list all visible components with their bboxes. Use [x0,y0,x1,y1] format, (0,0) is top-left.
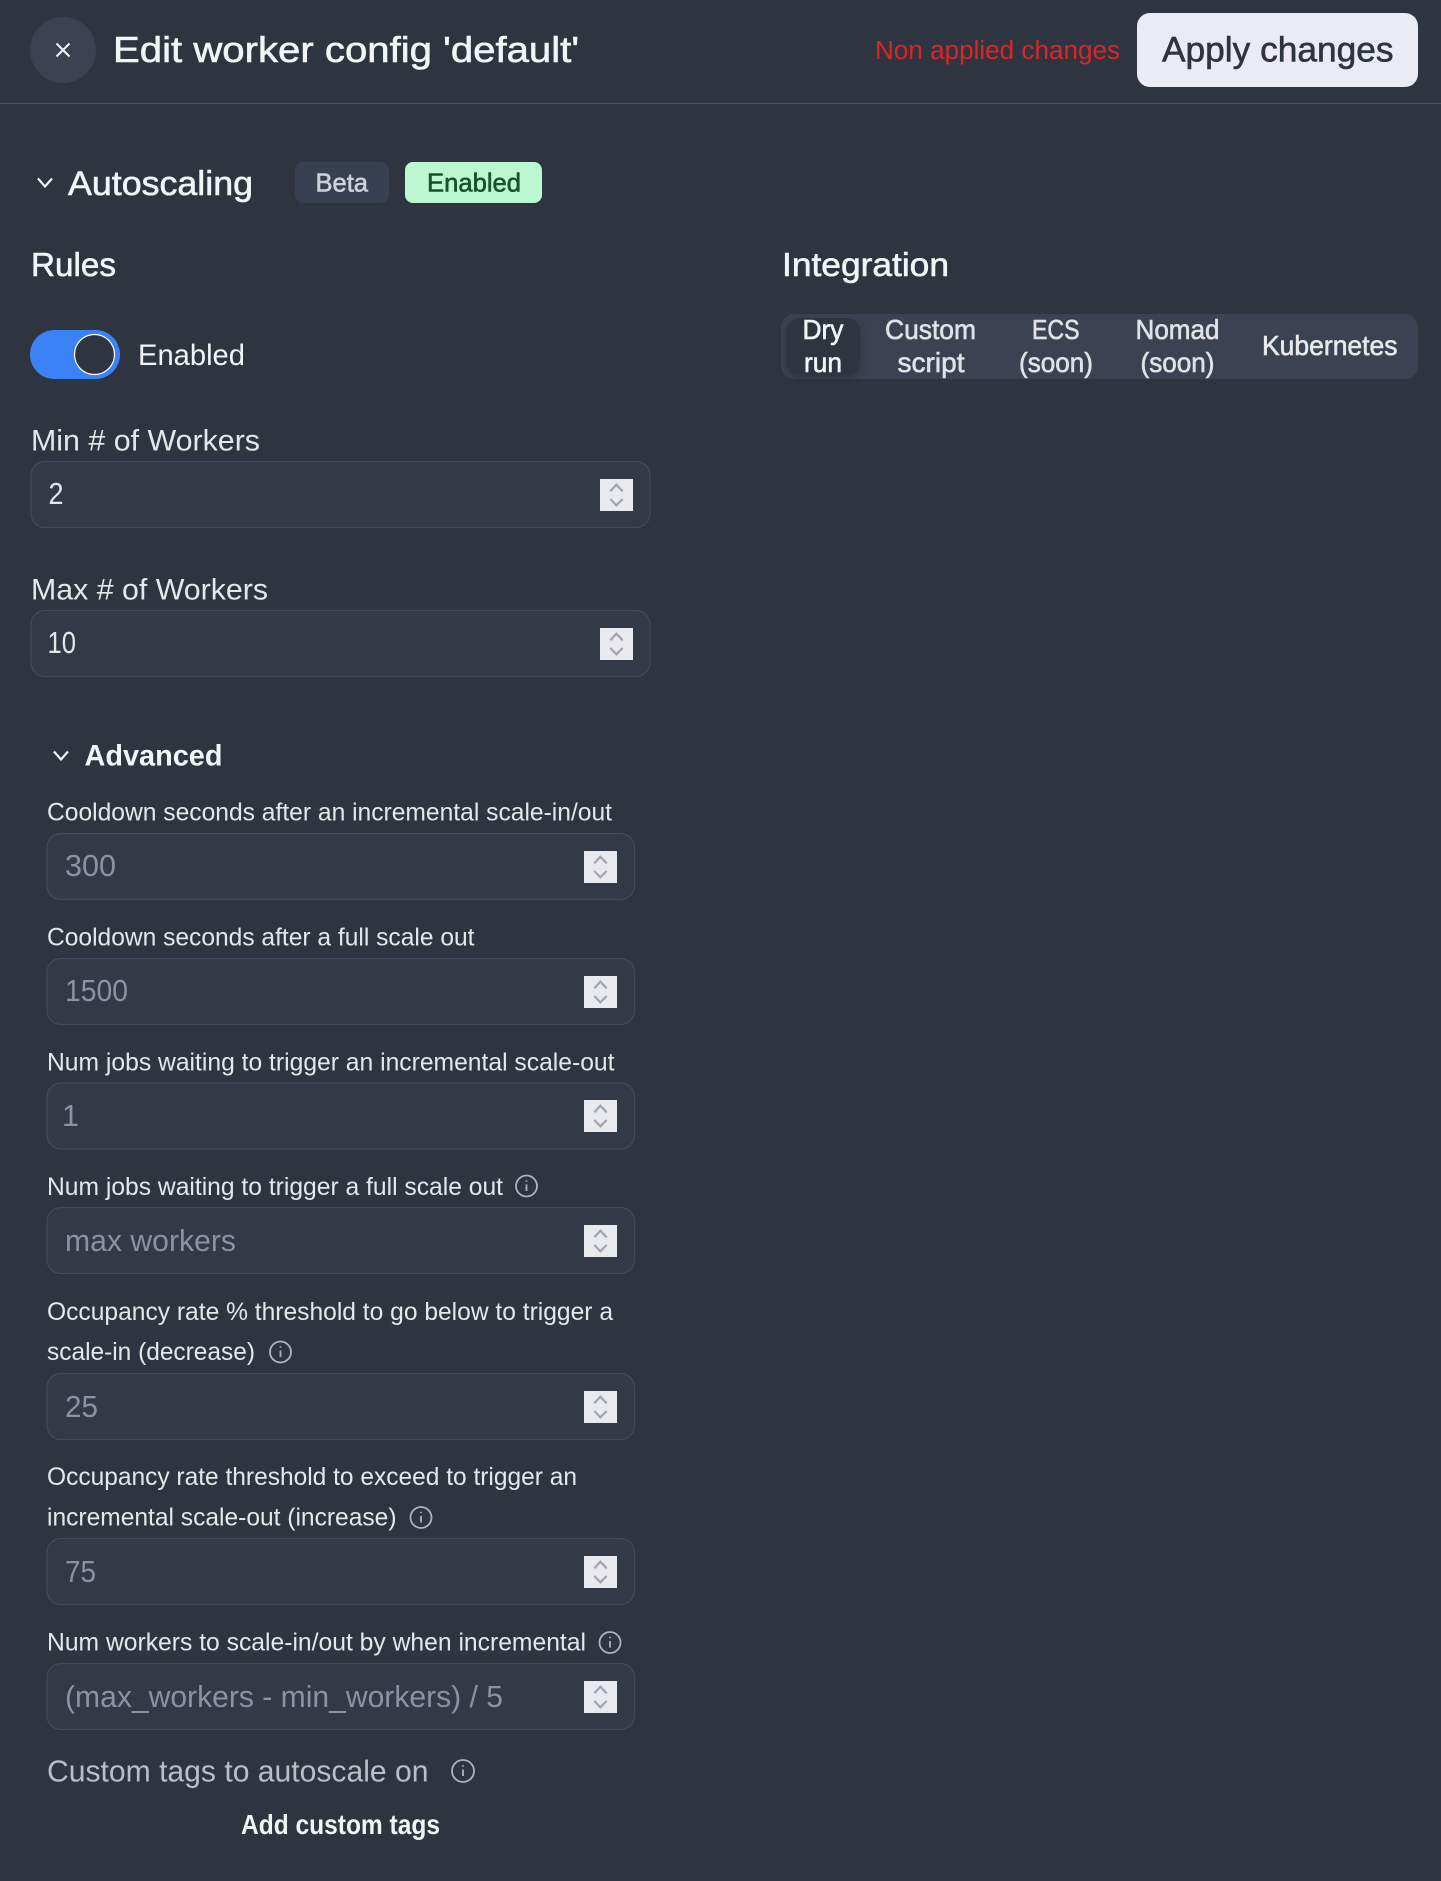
tab: nomad (soon): (soon) [1140,347,1214,378]
tab: dry run (selected) [786,314,860,378]
field: workers to scale by [47,1628,634,1730]
toggle: enabled [30,330,245,379]
tab: custom script: Custom [885,314,976,345]
title: Edit worker config 'default' [113,29,579,70]
field: occupancy scale-in threshold: 25 [65,1390,98,1424]
field: cooldown incremental: Cooldown seconds after an incremental scale-in/out [47,798,612,826]
tabs: integration type [781,314,1418,379]
field: jobs waiting full scale out: Num jobs waiting to trigger a full scale out [47,1173,503,1201]
field: max workers [31,574,650,676]
field: min workers: 2 [48,477,64,511]
heading: Autoscaling [68,165,253,203]
tab: nomad (soon) [1136,314,1220,378]
field: workers to scale by: Num workers to scale-in/out by when incremental [47,1628,586,1656]
button: apply changes [1137,13,1418,87]
tab: dry run (selected): Dry [802,314,844,345]
tab: ECS (soon) [1019,314,1093,378]
badge: beta: Beta [316,168,369,198]
icon: info [516,1176,537,1196]
icon: info [600,1632,620,1653]
custom tags label: Custom tags to autoscale on [47,1754,428,1788]
icon: info [452,1760,474,1782]
field: max workers: Max # of Workers [31,574,268,606]
field: occupancy scale-out threshold: 75 [65,1555,96,1589]
status: non applied changes: Non applied changes [875,37,1120,65]
field: jobs waiting full scale out: max workers [65,1224,236,1258]
badge: enabled: Enabled [427,168,521,198]
icon: info [410,1507,432,1528]
section heading: autoscaling [38,162,542,203]
field: occupancy scale-in threshold: scale-in (decrease) [47,1338,255,1366]
field: max workers: 10 [48,626,76,660]
tab: custom script: script [898,347,965,378]
badge: beta [295,162,389,203]
field: jobs waiting incremental: 1 [62,1099,79,1133]
heading: rules: Rules [31,246,116,283]
icon: info [270,1342,291,1362]
toggle: enabled: Enabled [138,339,245,372]
tab: ECS (soon): (soon) [1019,347,1093,378]
section heading: advanced: Advanced [84,740,222,772]
icon: chevron [38,178,52,186]
badge: enabled [405,162,542,203]
button: add custom tags: Add custom tags [241,1809,440,1840]
tab: custom script [885,314,976,378]
header bar [30,13,1418,87]
field: occupancy scale-in threshold [47,1298,634,1440]
field: jobs waiting incremental [47,1048,634,1149]
field: workers to scale by: (max_workers - min_workers) / 5 [65,1680,503,1714]
heading: integration: Integration [782,246,949,283]
tab: ECS (soon): ECS [1032,314,1080,345]
field: cooldown full scale out [47,924,634,1024]
field: jobs waiting full scale out [47,1173,634,1274]
tab: dry run (selected): run [804,347,842,378]
field: min workers [31,424,650,528]
field: cooldown full scale out: Cooldown seconds after a full scale out [47,924,474,952]
field: cooldown full scale out: 1500 [65,974,128,1008]
field: min workers: Min # of Workers [31,424,260,458]
field: occupancy scale-out threshold: incremental scale-out (increase) [47,1504,396,1532]
button: apply changes: Apply changes [1162,30,1394,70]
field: occupancy scale-out threshold: Occupancy rate threshold to exceed to trigger an [47,1463,577,1491]
tab: nomad (soon): Nomad [1136,314,1220,345]
field: cooldown incremental [47,798,634,900]
field: occupancy scale-out threshold [47,1463,634,1604]
tab: kubernetes: Kubernetes [1262,330,1398,361]
field: jobs waiting incremental: Num jobs waiting to trigger an incremental scale-out [47,1048,614,1076]
icon: close button [30,17,96,83]
field: occupancy scale-in threshold: Occupancy rate % threshold to go below to trigger a [47,1298,614,1326]
field: cooldown incremental: 300 [65,849,116,883]
